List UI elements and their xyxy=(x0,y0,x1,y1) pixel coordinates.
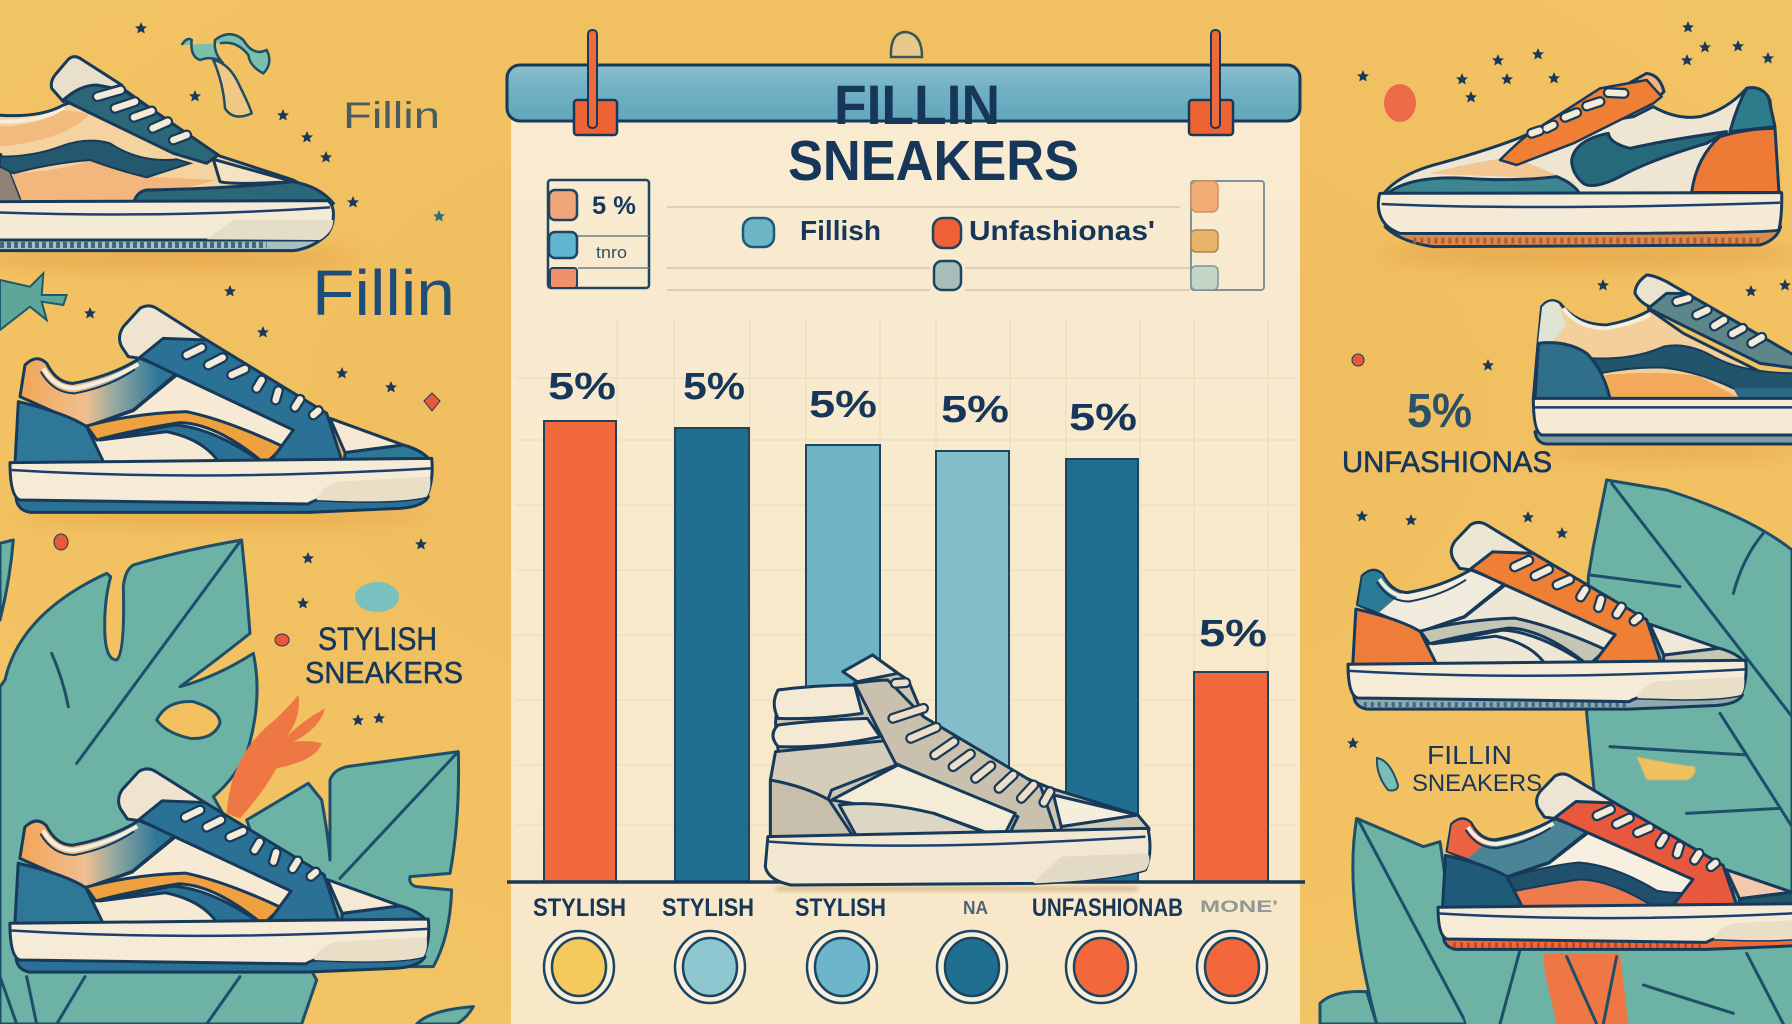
bar 1 xyxy=(544,421,616,882)
orange flower xyxy=(227,695,325,818)
legend box right xyxy=(1191,181,1264,290)
category labels: STYLISH xyxy=(662,894,754,922)
value labels: 5% xyxy=(548,366,616,408)
colour dots xyxy=(544,931,1267,1003)
right leaves xyxy=(1320,480,1792,1024)
red circle top right xyxy=(1384,84,1416,122)
shoe: bottom right xyxy=(1438,774,1792,949)
dot 1 xyxy=(544,931,614,1003)
text: Fillin Sneakers right: SNEAKERS xyxy=(1412,770,1542,797)
value labels: 5% xyxy=(941,389,1009,431)
legend box left: 5 % xyxy=(592,192,636,220)
clip right xyxy=(1189,30,1233,135)
baseline axis xyxy=(507,880,1305,884)
dot 5 xyxy=(1066,931,1136,1003)
value labels: 5% xyxy=(683,366,745,408)
leaf vein lower xyxy=(340,753,457,878)
bar 6 xyxy=(1194,672,1268,882)
text: Fillin Sneakers right xyxy=(1412,740,1542,797)
text: Fillin large: Fillin xyxy=(312,257,455,329)
leaf hole right xyxy=(1637,757,1695,780)
category labels: MONE' xyxy=(1200,897,1278,916)
category labels xyxy=(533,894,1278,922)
bar 3 xyxy=(806,445,880,882)
shoe: second right xyxy=(1533,275,1792,444)
shoe: top left xyxy=(0,57,333,251)
dot 4 xyxy=(937,931,1007,1003)
rail header xyxy=(507,65,1300,121)
clip left xyxy=(574,30,617,135)
bar 4 xyxy=(936,451,1009,882)
high-top sneaker xyxy=(765,655,1150,892)
teal squiggle icon xyxy=(182,34,269,117)
panel: chart board xyxy=(507,30,1305,1024)
leaf hole xyxy=(157,702,220,738)
orange flower right xyxy=(1543,953,1628,1024)
leaf: large right xyxy=(1587,480,1792,1024)
shoe: middle left xyxy=(10,306,432,512)
dot 2 xyxy=(675,931,745,1003)
flower petal lines xyxy=(1567,957,1617,1024)
legend: grey swatch xyxy=(934,261,961,290)
vein under shoe xyxy=(1500,950,1783,1024)
legend: unfashionas: Unfashionas' xyxy=(969,215,1155,246)
teal blob left xyxy=(355,582,399,612)
shoe shadows xyxy=(0,241,1792,525)
category labels: STYLISH xyxy=(533,894,626,922)
hook top xyxy=(891,32,922,57)
legend: fillish: Fillish xyxy=(800,215,881,246)
value labels: 5% xyxy=(1199,613,1267,655)
value labels: 5% xyxy=(809,384,877,426)
text: Unfashionas: UNFASHIONAS xyxy=(1342,446,1552,479)
legend box left xyxy=(548,180,649,288)
category labels: UNFASHIONAB xyxy=(1032,894,1183,922)
value labels xyxy=(548,366,1267,655)
dot 6 xyxy=(1197,931,1267,1003)
teal under shoe xyxy=(1440,940,1792,1024)
teal star leaf left xyxy=(0,273,67,330)
shoe: bottom left xyxy=(10,769,429,972)
board paper xyxy=(511,115,1300,1024)
bar 2 xyxy=(675,428,749,882)
leaf veins right xyxy=(1590,483,1792,1013)
dot 3 xyxy=(807,931,877,1003)
category labels: NA xyxy=(963,898,988,918)
leaf: left edge sliver xyxy=(0,540,13,620)
text: Fillin small: Fillin xyxy=(343,95,440,136)
text: Fillin Sneakers right: FILLIN xyxy=(1427,740,1512,770)
bar chart xyxy=(507,366,1305,882)
title xyxy=(788,73,1079,193)
leaf vein lines xyxy=(0,542,240,1024)
red markers xyxy=(54,354,1364,646)
title: FILLIN xyxy=(834,73,1000,136)
text: Stylish Sneakers: STYLISH xyxy=(318,621,437,657)
bar 5 xyxy=(1066,459,1138,882)
leaf: lower right xyxy=(247,752,459,967)
left leaves xyxy=(0,540,473,1024)
shoe: third right xyxy=(1348,522,1746,709)
small stars scattered xyxy=(84,21,1791,748)
legend box left: tnro xyxy=(596,243,627,262)
text: Stylish Sneakers: SNEAKERS xyxy=(305,655,463,690)
shoe: top right xyxy=(1378,73,1782,247)
leaf: bottom-left small xyxy=(1320,991,1377,1024)
text: Stylish Sneakers xyxy=(305,621,463,690)
category labels: STYLISH xyxy=(795,894,886,922)
legend: fillish xyxy=(743,215,881,247)
leaf: bottom corner xyxy=(417,1007,473,1024)
text: right 5%: 5% xyxy=(1407,385,1472,438)
teal blob right xyxy=(1377,758,1398,790)
leaf vein bottom xyxy=(1358,820,1783,1024)
leaf: bottom left xyxy=(1353,818,1467,1024)
title: SNEAKERS xyxy=(788,129,1079,193)
value labels: 5% xyxy=(1069,397,1137,439)
leaf: large monstera left xyxy=(0,540,317,1024)
star: teal xyxy=(433,210,445,222)
legend rule lines xyxy=(667,207,1190,290)
